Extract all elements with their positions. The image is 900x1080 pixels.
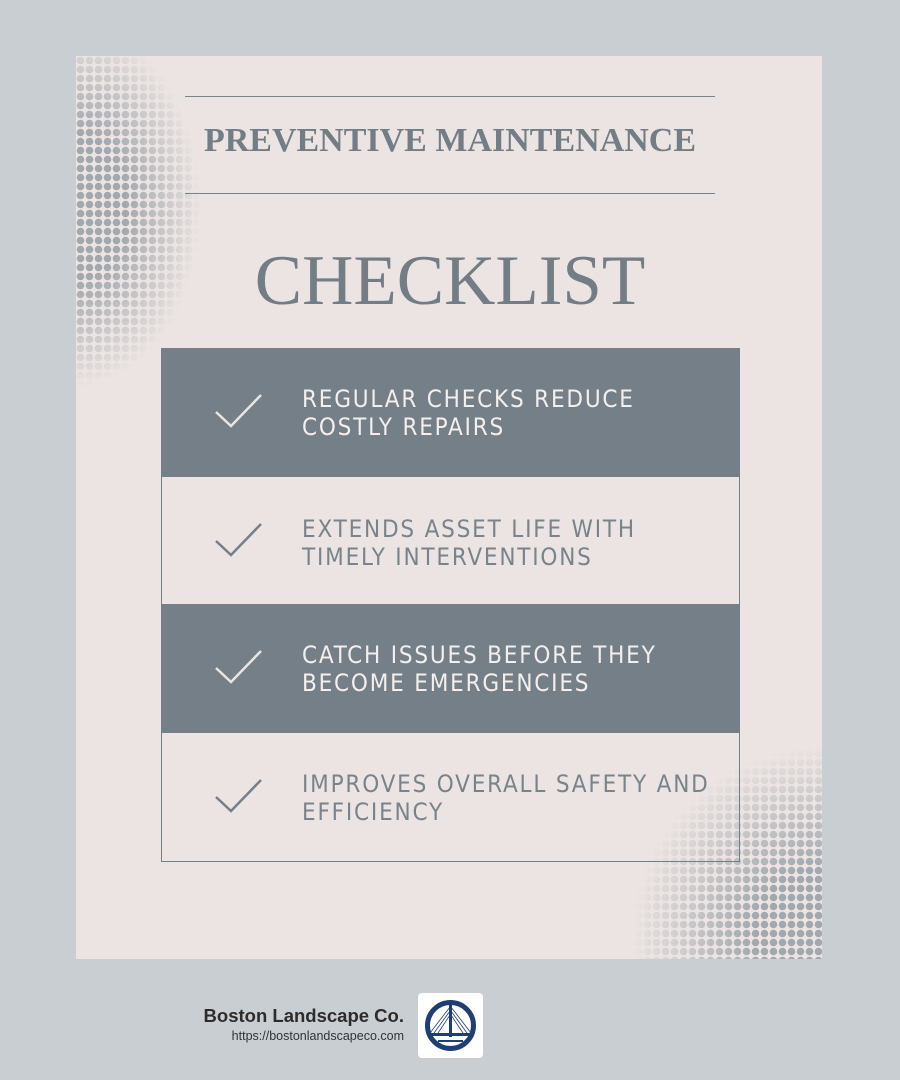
footer brand — [204, 1005, 404, 1043]
icon: logo — [418, 993, 483, 1058]
item 2: TIMELY INTERVENTIONS — [302, 543, 593, 571]
item 1 — [161, 348, 740, 477]
checklist box — [161, 348, 740, 862]
item 2 — [215, 515, 636, 571]
title: preventive maintenance — [185, 96, 715, 194]
item 4 — [215, 770, 710, 826]
item 4: EFFICIENCY — [302, 798, 444, 826]
item 3 — [161, 604, 740, 733]
item 3: CATCH ISSUES BEFORE THEY — [302, 641, 657, 669]
item 4: IMPROVES OVERALL SAFETY AND — [302, 770, 710, 798]
item 1: REGULAR CHECKS REDUCE — [302, 385, 635, 413]
item 1: COSTLY REPAIRS — [302, 413, 505, 441]
item 3: BECOME EMERGENCIES — [302, 669, 590, 697]
title: preventive maintenance: PREVENTIVE MAINTENANCE — [204, 122, 696, 159]
footer brand: Boston Landscape Co. — [204, 1005, 404, 1026]
panel: card — [76, 56, 822, 959]
footer brand: https://bostonlandscapeco.com — [232, 1029, 404, 1043]
item 2: EXTENDS ASSET LIFE WITH — [302, 515, 636, 543]
halftone decorations — [76, 56, 822, 959]
heading: checklist: CHECKLIST — [255, 242, 645, 320]
